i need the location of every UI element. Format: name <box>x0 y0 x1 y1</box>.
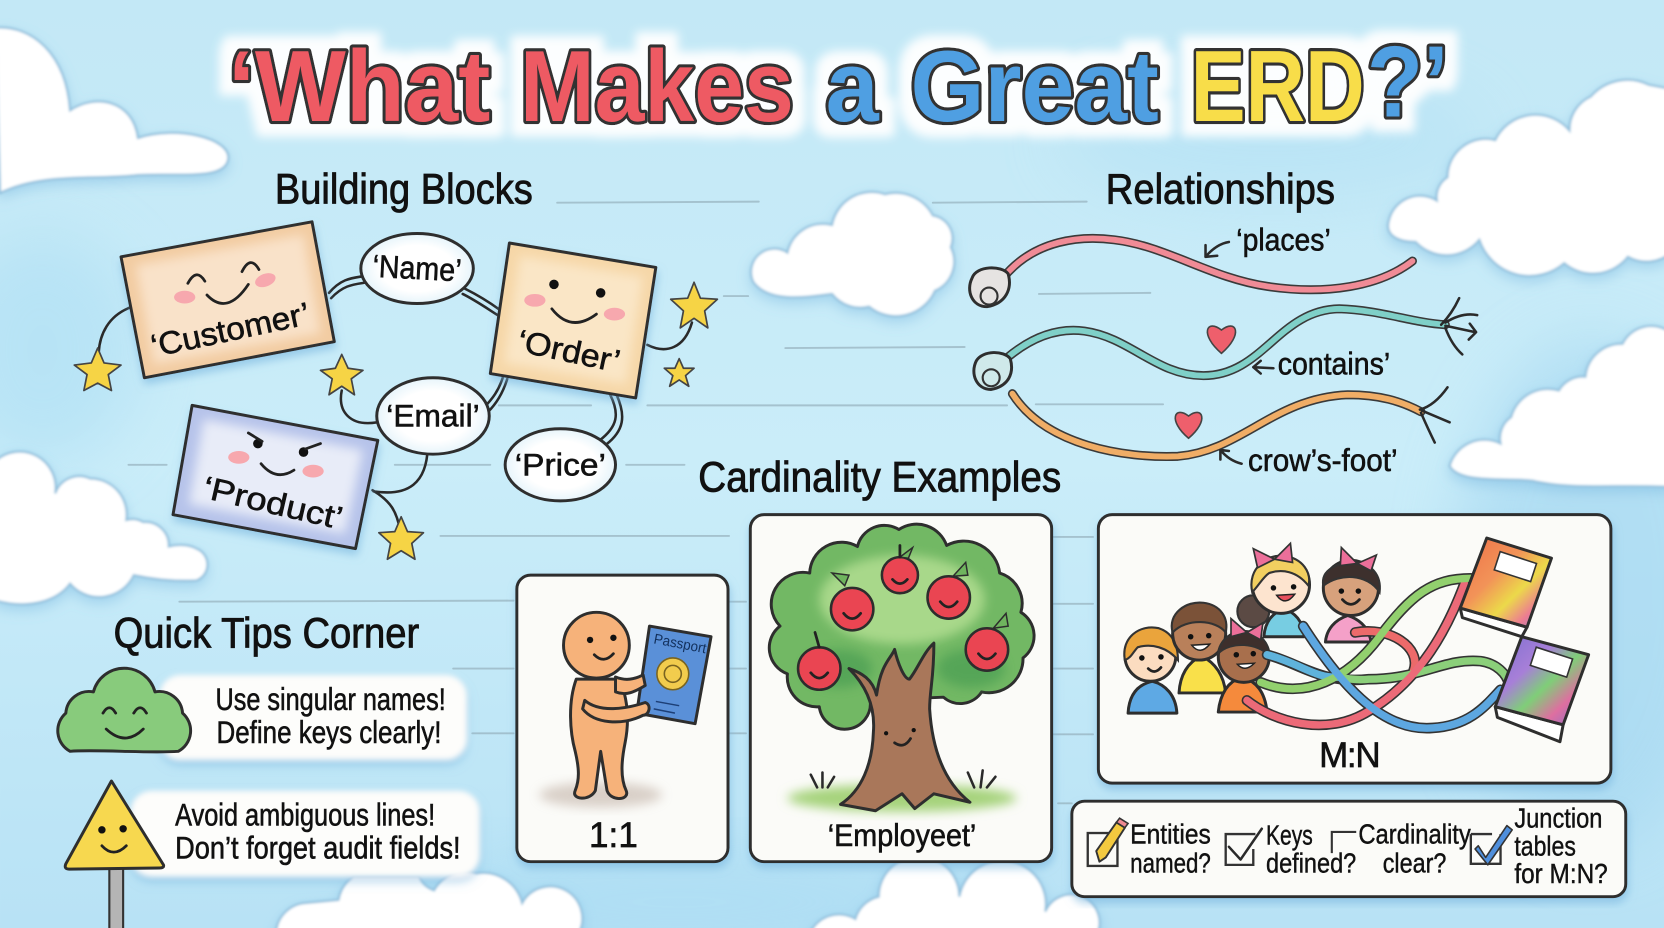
title: ERD <box>1191 31 1365 143</box>
connectors between entities and attributes <box>99 276 692 531</box>
cloud: top left <box>0 27 228 193</box>
cloud: bottom centre <box>810 856 1100 928</box>
panel: quick tips corner <box>58 609 480 928</box>
kid: blonde girl <box>1251 543 1310 637</box>
title <box>228 27 1449 143</box>
check item: keys defined: defined? <box>1266 847 1356 878</box>
check item: cardinality clear: clear? <box>1383 847 1446 878</box>
attribute: Price <box>505 429 616 501</box>
illustration: orange book <box>1460 538 1551 637</box>
cloud: left middle <box>0 452 207 604</box>
illustration: person holding passport: Passport <box>652 631 708 657</box>
relationship line: places <box>970 221 1412 307</box>
tip bubble: warnings: Don’t forget audit fields! <box>175 829 461 865</box>
check item: junction tables: for M:N? <box>1514 858 1608 889</box>
cloud: upper right <box>1388 80 1664 276</box>
label: M:N: M:N <box>1319 736 1381 775</box>
check item: junction tables <box>1471 803 1608 889</box>
heading: cardinality examples: Cardinality Examples <box>698 453 1061 500</box>
entity: Customer: ‘Customer’ <box>148 295 313 364</box>
card: one to many <box>750 515 1052 862</box>
label: 1:1: 1:1 <box>589 816 638 855</box>
icon: yellow warning sign <box>65 781 164 928</box>
attribute: Email <box>377 378 489 454</box>
title: Great <box>911 31 1159 143</box>
title: ?’ <box>1367 27 1449 139</box>
title: Makes <box>520 31 794 143</box>
title: ‘What <box>228 31 490 143</box>
relationship line: contains: contains’ <box>1278 346 1390 382</box>
kid: orange shirt <box>1218 595 1269 712</box>
check item: cardinality clear: Cardinality <box>1358 819 1471 850</box>
illustration: person holding passport <box>539 612 711 808</box>
tip bubble: naming: Use singular names! <box>215 681 446 717</box>
check item: keys defined <box>1226 820 1356 878</box>
entity: Product <box>173 405 378 549</box>
check item: entities named: named? <box>1130 847 1211 878</box>
relationship line: places: ‘places’ <box>1236 221 1331 257</box>
relationship line: crow's-foot <box>1012 387 1450 478</box>
heading: quick tips corner: Quick Tips Corner <box>114 609 419 656</box>
attribute: Email: ‘Email’ <box>386 398 480 434</box>
kid: pink shirt <box>1323 548 1380 642</box>
cloud: lower right <box>1450 326 1664 487</box>
heading: building blocks: Building Blocks <box>275 166 533 213</box>
card: one to one <box>517 575 728 862</box>
illustration: apple tree <box>769 524 1034 812</box>
panel: relationships <box>970 166 1477 478</box>
cloud: center <box>751 192 954 316</box>
attribute: Price: ‘Price’ <box>515 446 606 482</box>
entity: Product: ‘Product’ <box>200 469 346 536</box>
check item: entities named: Entities <box>1130 819 1211 850</box>
tip bubble: warnings <box>131 791 480 877</box>
entity: Order <box>490 243 656 398</box>
illustration: many-to-many ropes <box>1247 578 1509 728</box>
tip bubble: warnings: Avoid ambiguous lines! <box>175 797 435 833</box>
tip bubble: naming <box>159 675 467 760</box>
cloud: bottom left <box>276 872 582 928</box>
entity: Customer <box>121 222 334 378</box>
check item: cardinality clear <box>1332 819 1471 878</box>
stars <box>74 282 717 559</box>
panel: checklist <box>1072 801 1626 897</box>
kid: yellow shirt <box>1172 603 1226 693</box>
icon: green smiling cloud <box>58 668 191 752</box>
check item: junction tables: Junction <box>1514 803 1602 834</box>
card: many to many <box>1098 515 1611 783</box>
illustration: kids <box>1124 543 1380 713</box>
attribute: Name: ‘Name’ <box>372 248 463 288</box>
illustration: purple book <box>1495 637 1589 742</box>
check item: entities named <box>1088 818 1211 878</box>
apples <box>798 557 1008 690</box>
label: Employeet: ‘Employeet’ <box>828 817 976 853</box>
relationship line: contains <box>974 298 1477 389</box>
check item: junction tables: tables <box>1514 830 1576 861</box>
relationship line: crow's-foot: crow’s-foot’ <box>1248 442 1398 478</box>
tip bubble: naming: Define keys clearly! <box>217 714 441 750</box>
title: a <box>826 31 880 143</box>
panel: building blocks <box>74 166 717 559</box>
heading: relationships: Relationships <box>1106 166 1335 213</box>
kid: blue shirt <box>1124 627 1178 713</box>
attribute: Name <box>361 233 473 303</box>
entity: Order: ‘Order’ <box>514 322 624 379</box>
check item: keys defined: Keys <box>1266 820 1313 851</box>
